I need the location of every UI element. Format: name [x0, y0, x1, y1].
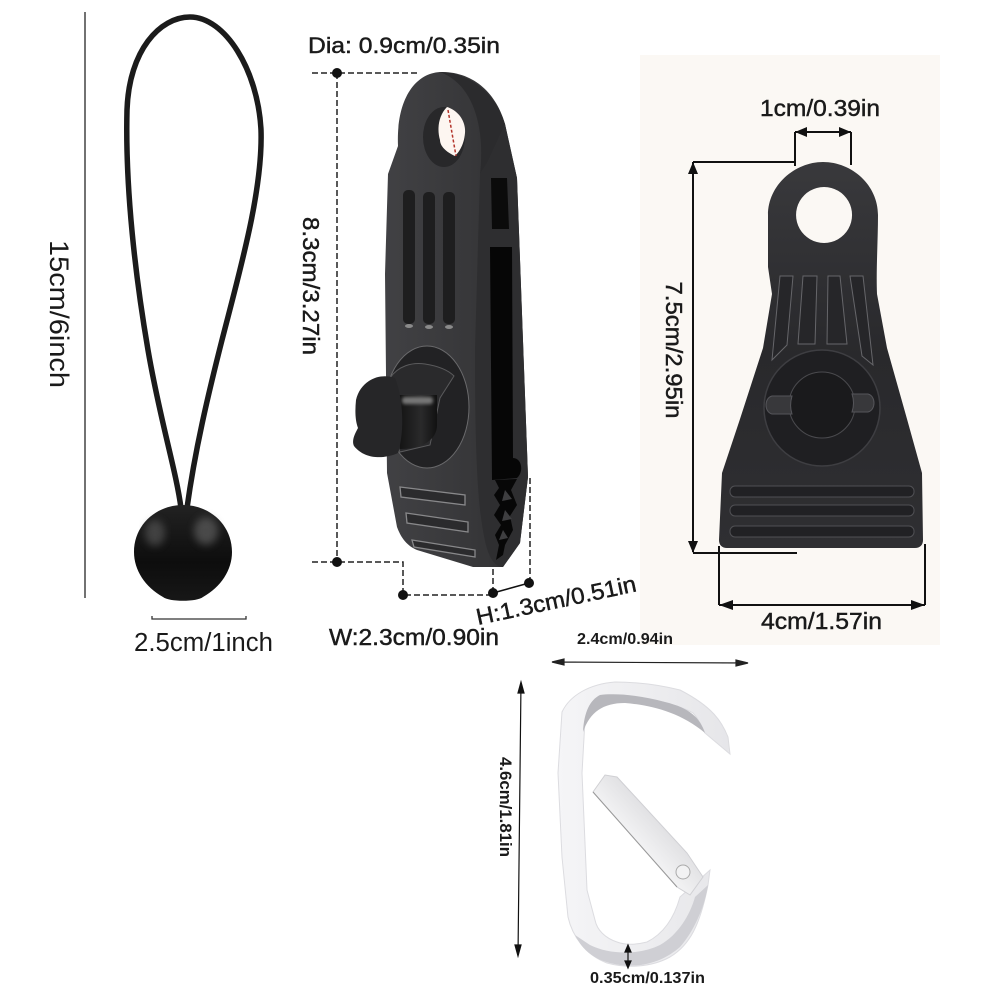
depth connector	[493, 583, 529, 593]
clip outline	[719, 162, 923, 548]
label: clip base width: 4cm/1.57in	[761, 608, 882, 634]
panel: cream background behind flat clip	[640, 55, 940, 645]
label: clip length: 8.3cm/3.27in	[298, 217, 324, 355]
carabiner gate	[593, 775, 703, 895]
white hole opening	[438, 107, 465, 156]
label: wire thickness: 0.35cm/0.137in	[590, 970, 705, 987]
knob base	[385, 346, 469, 468]
knob wing	[385, 364, 454, 452]
label: carabiner height: 4.6cm/1.81in	[496, 757, 514, 857]
flat clip group	[661, 95, 925, 634]
horizontal ribs	[730, 486, 914, 537]
carabiner group	[496, 631, 748, 987]
icon: elastic loop	[127, 17, 261, 508]
knob wings	[766, 396, 792, 414]
long slot	[490, 247, 521, 480]
inner top shadow band	[583, 694, 705, 733]
dimension guide lines	[693, 132, 925, 605]
label: hole diameter: Dia: 0.9cm/0.35in	[308, 33, 500, 58]
side strip shading	[475, 124, 528, 567]
knob body	[397, 395, 437, 449]
upper grooves	[403, 190, 455, 329]
label: clip thickness: H:1.3cm/0.51in	[474, 571, 638, 630]
carabiner frame	[558, 682, 730, 966]
label: cord height: 15cm/6inch	[44, 240, 74, 388]
guide dots	[332, 68, 534, 600]
upper ribs	[772, 276, 873, 365]
dimension arrowheads	[688, 127, 925, 610]
knob cap	[353, 376, 402, 457]
icon: ball stopper	[134, 505, 232, 601]
turn knob base	[764, 350, 880, 466]
lower ribs	[400, 487, 475, 557]
turn knob	[766, 372, 874, 438]
top slot	[491, 178, 509, 229]
height arrow	[515, 682, 524, 956]
red diameter mark	[448, 110, 456, 156]
label: clip height: 7.5cm/2.95in	[661, 281, 687, 419]
width arrow	[552, 659, 748, 666]
dashed height and width guides	[312, 73, 530, 595]
side-view clip group	[298, 33, 638, 650]
bungee ball cord	[44, 12, 273, 657]
teeth	[494, 479, 517, 560]
label: carabiner width: 2.4cm/0.94in	[577, 631, 673, 648]
gate rivet	[676, 865, 690, 879]
thickness arrow	[625, 945, 631, 968]
label: clip width: W:2.3cm/0.90in	[329, 624, 499, 650]
clip body	[385, 72, 528, 567]
label: ball width: 2.5cm/1inch	[134, 629, 273, 657]
lower outer shadow band	[575, 885, 708, 966]
ball width line	[152, 616, 246, 619]
eyelet hole	[423, 107, 465, 167]
gate edge line	[593, 792, 677, 887]
tab rim shadow	[440, 72, 505, 174]
height dimension line	[84, 12, 86, 598]
label: hole width: 1cm/0.39in	[760, 95, 880, 121]
